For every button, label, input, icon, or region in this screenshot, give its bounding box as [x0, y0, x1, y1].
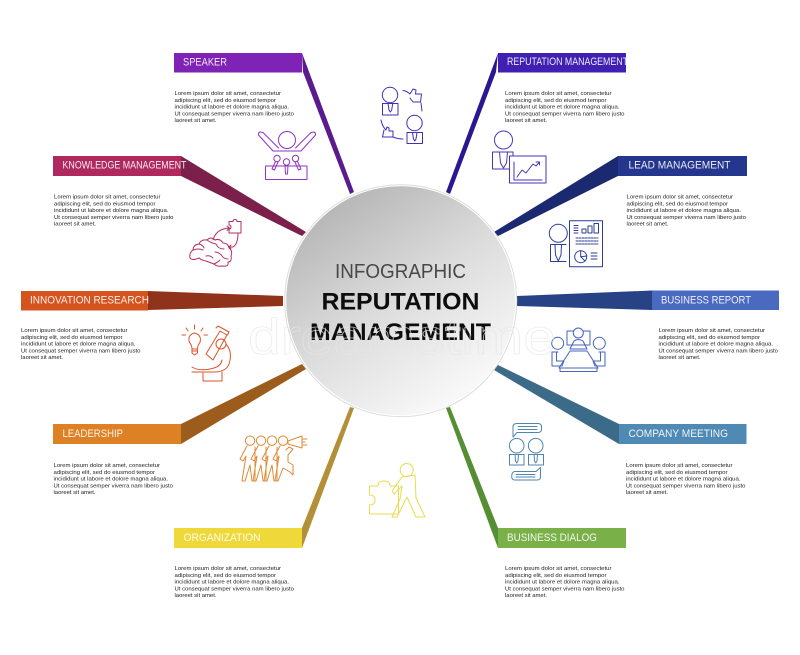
text block: leadership: adipiscing elit, sed do eiusmod tempor [54, 470, 155, 476]
text block: lead management: Ut consequat semper viverra nam libero justo [626, 215, 747, 221]
heading: leadership: LEADERSHIP [62, 428, 123, 440]
icon: person with growth chart [492, 131, 546, 183]
connector: knowledge management [181, 156, 306, 236]
panel: business report [517, 290, 779, 372]
panel: lead management [494, 156, 747, 267]
icon: person pushing puzzle piece [370, 464, 425, 517]
text block: lead management: adipiscing elit, sed do eiusmod tempor [626, 202, 728, 208]
text block: company meeting: incididunt ut labore et dolore magna aliqua. [626, 476, 741, 482]
text block: speaker: Lorem ipsum dolor sit amet, consectetur [174, 91, 281, 97]
text block: organization: incididunt ut labore et dolore magna aliqua. [174, 580, 289, 586]
connector: reputation management [446, 53, 498, 194]
connector: company meeting [494, 365, 619, 444]
text block: lead management: laoreet sit amet. [626, 222, 669, 228]
text block: knowledge management: incididunt ut labore et dolore magna aliqua. [54, 208, 169, 214]
text block: innovation research: incididunt ut labore et dolore magna aliqua. [21, 342, 136, 348]
text block: innovation research: Ut consequat semper viverra nam libero justo [21, 348, 141, 354]
text block: innovation research: laoreet sit amet. [21, 355, 63, 361]
text block: business dialog [505, 566, 625, 599]
text block: business dialog: adipiscing elit, sed do eiusmod tempor [505, 573, 607, 579]
connector: business dialog [446, 407, 498, 548]
banner: company meeting [619, 424, 746, 444]
text block: knowledge management: Lorem ipsum dolor sit amet, consectetur [54, 195, 161, 201]
panel: innovation research [21, 291, 283, 381]
icon: speaker at podium [258, 132, 316, 180]
text block: knowledge management: adipiscing elit, sed do eiusmod tempor [54, 202, 156, 208]
title: reputation: REPUTATION [322, 288, 480, 316]
banner: business report [652, 290, 779, 310]
connector: leadership [181, 364, 306, 444]
text block: business report: incididunt ut labore et dolore magna aliqua. [658, 342, 773, 348]
panel: reputation management [381, 53, 628, 194]
text block: lead management [626, 195, 747, 228]
text block: business report [658, 328, 779, 361]
panel: speaker [174, 53, 354, 194]
title: management: MANAGEMENT [310, 319, 491, 346]
banner: reputation management [498, 53, 626, 72]
icon: group following a leader with megaphone [240, 436, 307, 481]
text block: innovation research: adipiscing elit, sed do eiusmod tempor [21, 335, 123, 341]
text block: reputation management [505, 91, 625, 124]
text block: lead management: Lorem ipsum dolor sit amet, consectetur [626, 195, 733, 201]
watermark: dreamstime [248, 309, 556, 365]
text block: speaker: laoreet sit amet. [174, 118, 217, 124]
text block: speaker: incididunt ut labore et dolore magna aliqua. [174, 104, 289, 110]
icon: brain and puzzle piece [190, 220, 241, 266]
text block: business dialog: Ut consequat semper viverra nam libero justo [505, 586, 625, 592]
heading: business dialog: BUSINESS DIALOG [507, 532, 597, 544]
connector: speaker [302, 53, 354, 194]
text block: reputation management: laoreet sit amet. [505, 118, 547, 124]
text block: leadership: Lorem ipsum dolor sit amet, consectetur [54, 463, 160, 469]
heading: reputation management: REPUTATION MANAGEMENT [507, 56, 628, 68]
icon: meeting around a table [552, 328, 605, 372]
panel: organization [174, 407, 425, 599]
text block: leadership: laoreet sit amet. [54, 490, 96, 496]
text block: leadership: incididunt ut labore et dolore magna aliqua. [54, 476, 168, 482]
panel: business dialog [446, 407, 626, 599]
text block: company meeting: Ut consequat semper viverra nam libero justo [626, 483, 746, 489]
text block: business report: Ut consequat semper viverra nam libero justo [658, 348, 779, 354]
text block: business report: Lorem ipsum dolor sit amet, consectetur [658, 328, 765, 334]
panel: leadership [53, 364, 307, 496]
banner: organization [174, 528, 302, 548]
text block: reputation management: adipiscing elit, sed do eiusmod tempor [505, 98, 607, 104]
banner: knowledge management [53, 156, 181, 176]
text block: speaker [174, 91, 295, 124]
icon: two people giving thumbs up [381, 87, 422, 144]
text block: organization: adipiscing elit, sed do eiusmod tempor [174, 573, 276, 579]
text block: reputation management: Ut consequat semper viverra nam libero justo [505, 111, 625, 117]
connector: business report [517, 290, 652, 310]
text block: business dialog: Lorem ipsum dolor sit amet, consectetur [505, 566, 612, 572]
central disc [285, 185, 517, 417]
panel: company meeting [494, 365, 746, 496]
text block: speaker: Ut consequat semper viverra nam libero justo [174, 111, 295, 117]
text block: organization [174, 566, 295, 599]
heading: knowledge management: KNOWLEDGE MANAGEMENT [62, 160, 187, 172]
text block: leadership [54, 463, 174, 496]
panel: knowledge management [53, 156, 306, 266]
heading: innovation research: INNOVATION RESEARCH [30, 294, 149, 306]
connector: organization [302, 407, 354, 548]
heading: business report: BUSINESS REPORT [661, 294, 751, 306]
heading: lead management: LEAD MANAGEMENT [628, 160, 731, 172]
text block: knowledge management: Ut consequat semper viverra nam libero justo [54, 215, 174, 221]
text block: organization: Ut consequat semper viverra nam libero justo [174, 586, 295, 592]
icon: two people in dialogue [509, 424, 544, 480]
text block: organization: Lorem ipsum dolor sit amet, consectetur [174, 566, 281, 572]
banner: leadership [53, 424, 181, 444]
text block: company meeting: Lorem ipsum dolor sit amet, consectetur [626, 463, 733, 469]
text block: speaker: adipiscing elit, sed do eiusmod tempor [174, 98, 276, 104]
text block: innovation research: Lorem ipsum dolor sit amet, consectetur [21, 328, 128, 334]
text block: leadership: Ut consequat semper viverra nam libero justo [54, 483, 174, 489]
banner: lead management [618, 156, 747, 176]
icon: person with report [549, 221, 602, 267]
connector: lead management [494, 156, 618, 236]
icon: light bulb and microscope [182, 325, 230, 381]
banner: innovation research [21, 291, 148, 310]
text block: business report: adipiscing elit, sed do eiusmod tempor [658, 335, 760, 341]
text block: reputation management: Lorem ipsum dolor sit amet, consectetur [505, 91, 612, 97]
heading: speaker: SPEAKER [183, 56, 227, 68]
text block: business dialog: laoreet sit amet. [505, 593, 547, 599]
text block: reputation management: incididunt ut labore et dolore magna aliqua. [505, 104, 620, 110]
text block: business dialog: incididunt ut labore et dolore magna aliqua. [505, 580, 620, 586]
text block: knowledge management: laoreet sit amet. [54, 222, 96, 228]
text block: organization: laoreet sit amet. [174, 593, 217, 599]
heading: company meeting: COMPANY MEETING [628, 428, 728, 440]
title: infographic: INFOGRAPHIC [335, 260, 466, 283]
text block: knowledge management [54, 195, 174, 228]
text block: lead management: incididunt ut labore et dolore magna aliqua. [626, 208, 741, 214]
heading: organization: ORGANIZATION [184, 532, 260, 544]
text block: company meeting [626, 463, 746, 496]
text block: business report: laoreet sit amet. [658, 355, 701, 361]
text block: company meeting: laoreet sit amet. [626, 490, 668, 496]
banner: speaker [174, 53, 302, 72]
connector: innovation research [148, 291, 283, 310]
banner: business dialog [498, 528, 626, 548]
text block: company meeting: adipiscing elit, sed do eiusmod tempor [626, 470, 728, 476]
text block: innovation research [21, 328, 141, 361]
